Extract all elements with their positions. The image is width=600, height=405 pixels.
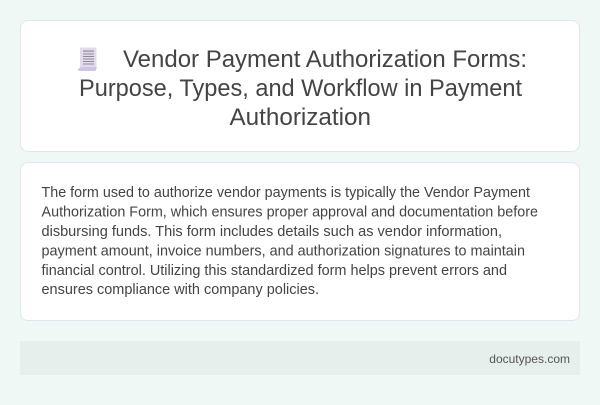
text block: description: The form used to authorize vendor payments is typically the Vendor Payment (42, 185, 530, 201)
panel: description card (20, 162, 580, 321)
text: footer source: docutypes.com (489, 352, 570, 366)
panel: title card (20, 20, 580, 152)
text block: description: ensures compliance with company policies. (42, 282, 319, 298)
panel: footer bar (20, 341, 580, 375)
icon: receipt document (78, 48, 97, 71)
text block: description: Authorization Form, which ensures proper approval and documentation before (42, 204, 538, 220)
text block: description: disbursing funds. This form includes details such as vendor information, (42, 224, 502, 240)
heading: title (79, 46, 527, 131)
heading: title: Purpose, Types, and Workflow in Payment (79, 75, 522, 102)
heading: title: Authorization (230, 104, 371, 131)
heading: title: Vendor Payment Authorization Forms: (123, 46, 527, 73)
text block: description (42, 185, 538, 298)
text block: description: payment amount, invoice numbers, and authorization signatures to maintain (42, 244, 525, 260)
text block: description: financial control. Utilizing this standardized form helps prevent errors and (42, 263, 507, 279)
